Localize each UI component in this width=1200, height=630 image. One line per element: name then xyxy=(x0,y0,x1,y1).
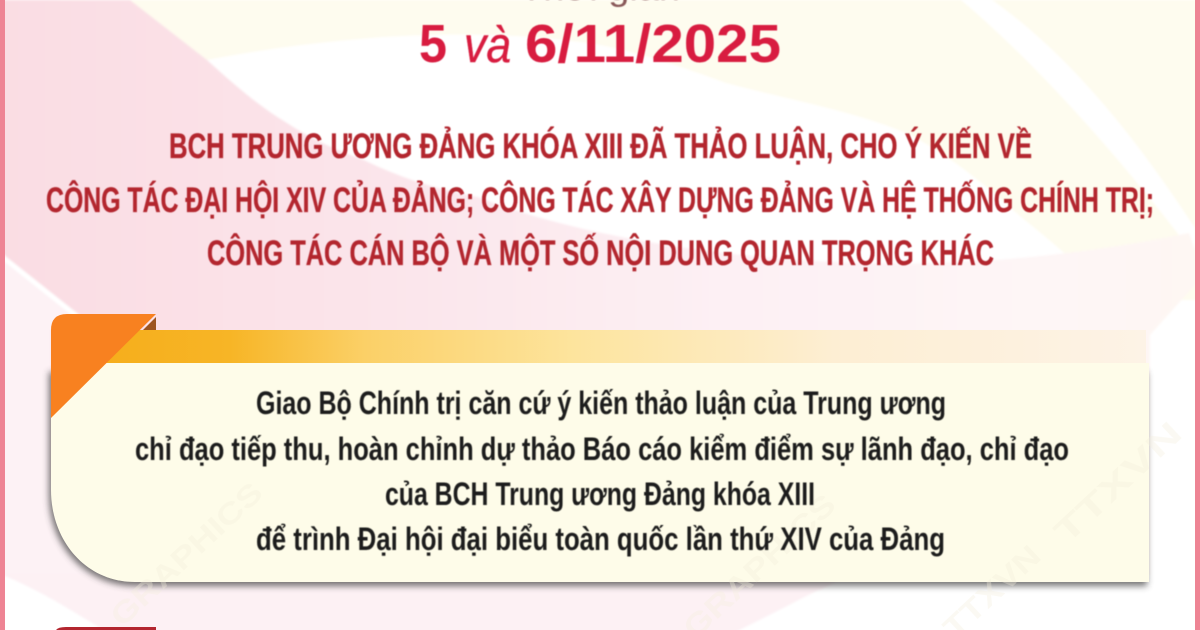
card text: để trình Đại hội đại biểu toàn quốc lần thứ XIV của Đảng xyxy=(256,521,945,557)
next card top edge xyxy=(56,627,156,630)
date: 6/11/2025 xyxy=(525,14,781,74)
watermark: TTXVN xyxy=(1047,415,1189,550)
panel: directive card xyxy=(49,314,1149,586)
orange corner ribbon xyxy=(51,314,156,418)
gold header bar xyxy=(105,330,1146,363)
watermark xyxy=(104,415,1189,630)
heading xyxy=(46,126,1154,273)
card text xyxy=(135,385,1069,557)
card text: Giao Bộ Chính trị căn cứ ý kiến thảo luận của Trung ương xyxy=(256,385,946,421)
date: 5 xyxy=(419,14,447,74)
card text: của BCH Trung ương Đảng khóa XIII xyxy=(385,476,815,512)
date xyxy=(419,14,781,74)
date: và xyxy=(464,17,511,73)
watermark: GRAPHICS xyxy=(104,476,269,630)
card body xyxy=(51,363,1149,582)
